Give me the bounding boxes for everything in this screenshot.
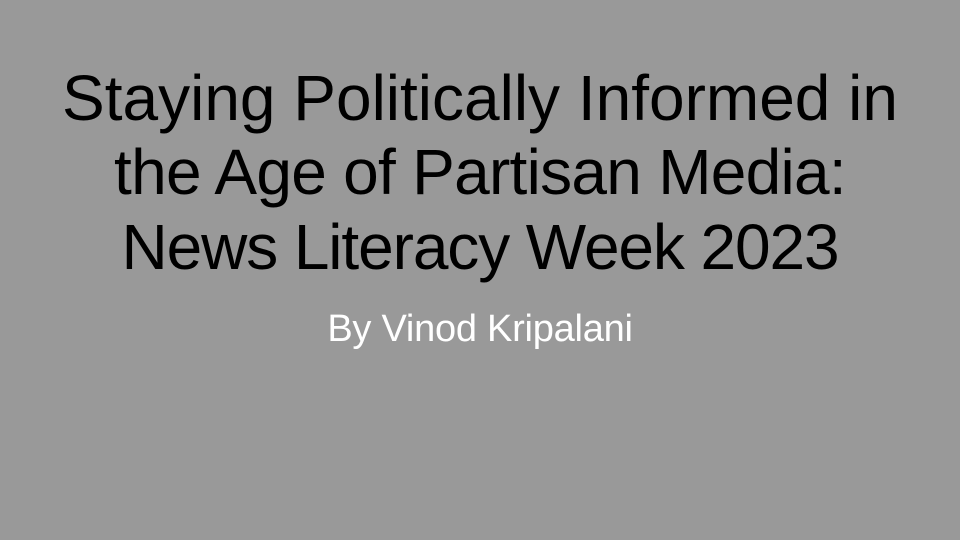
- title: [62, 62, 898, 283]
- subtitle: author: By Vinod Kripalani: [327, 308, 633, 350]
- title: the Age of Partisan Media:: [114, 136, 846, 208]
- title: News Literacy Week 2023: [122, 211, 838, 283]
- title: Staying Politically Informed in: [62, 62, 898, 134]
